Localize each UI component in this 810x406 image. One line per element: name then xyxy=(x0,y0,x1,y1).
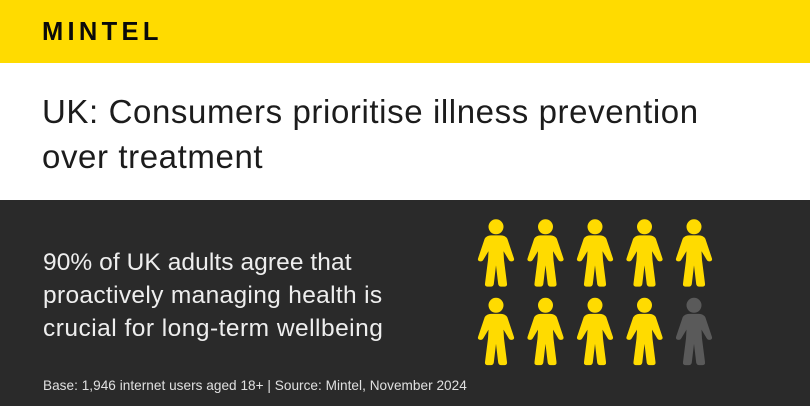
statistic text: 90% of UK adults agree that xyxy=(43,248,352,276)
statistic text: proactively managing health is xyxy=(43,282,382,308)
person 1 xyxy=(478,220,514,286)
person 5 xyxy=(676,220,712,286)
person 8 xyxy=(577,298,613,365)
title: UK: Consumers prioritise illness prevention xyxy=(42,93,699,130)
person 7 xyxy=(528,298,563,365)
source note: Base: 1,946 internet users aged 18+ | Source: Mintel, November 2024 xyxy=(43,378,467,393)
person 3 xyxy=(577,220,613,286)
person 10 (grey) xyxy=(676,298,712,365)
person 6 xyxy=(478,298,514,365)
statistic text: crucial for long-term wellbeing xyxy=(43,314,383,342)
panel: statistic xyxy=(0,200,810,406)
person 9 xyxy=(627,298,662,365)
person 4 xyxy=(627,220,662,286)
title xyxy=(42,93,699,175)
pictogram: 9 in 10 adults xyxy=(478,219,712,366)
title: over treatment xyxy=(42,138,263,175)
header band xyxy=(0,0,810,63)
logo: MINTEL: MINTEL xyxy=(42,18,163,46)
person 2 xyxy=(528,220,563,286)
statistic text xyxy=(43,248,383,342)
